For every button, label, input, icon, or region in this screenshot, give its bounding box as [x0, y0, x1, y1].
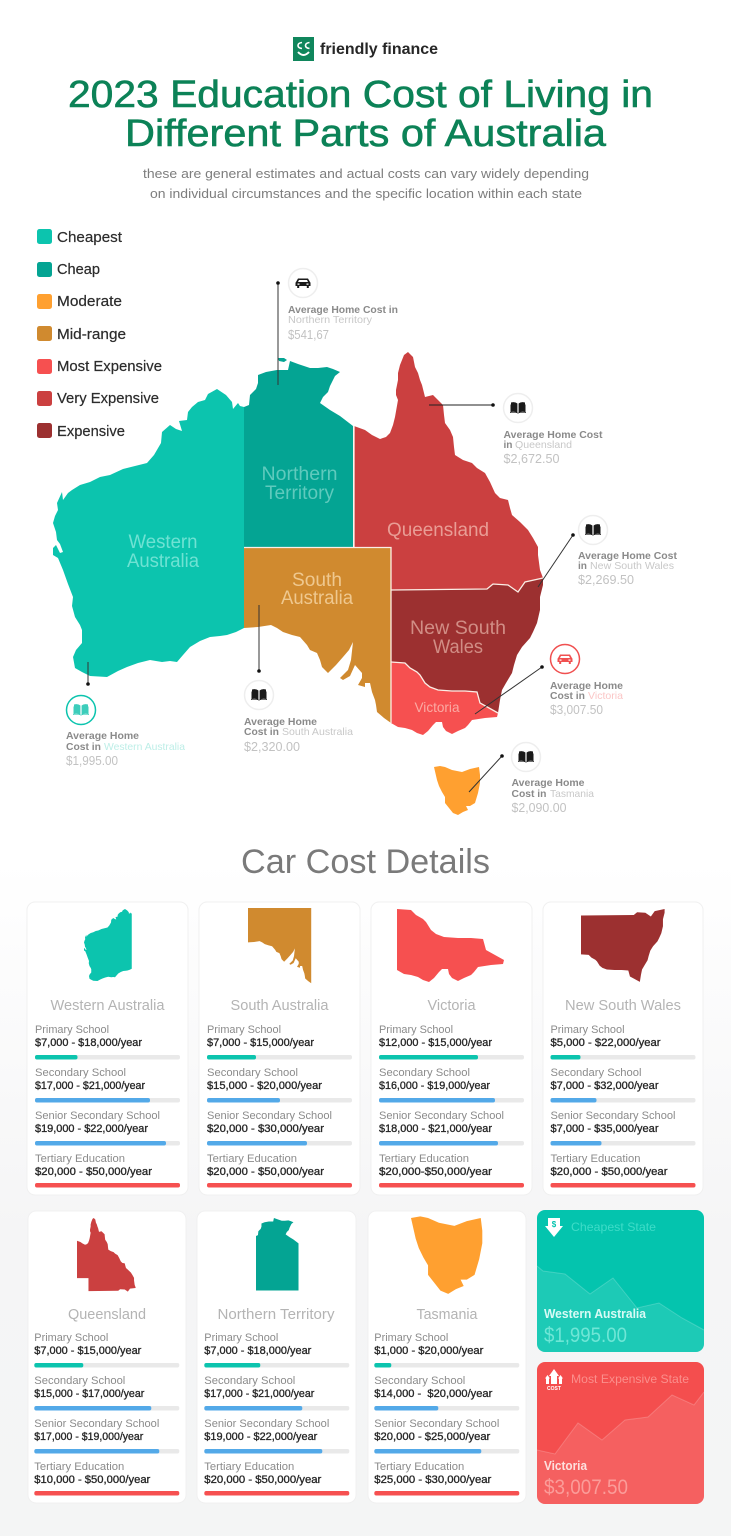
state: Queensland: Queensland — [387, 520, 489, 541]
state: Western Australia: Australia — [127, 551, 199, 572]
callout: Tasmania — [469, 742, 594, 815]
callout: Tasmania: Average Home — [512, 777, 585, 789]
card: Queensland: Secondary School — [34, 1375, 125, 1387]
panel: cheapest state: $1,995.00 — [544, 1324, 627, 1347]
card: Western Australia: Primary School — [35, 1024, 109, 1036]
callout: New South Wales: in — [578, 560, 587, 572]
card: Western Australia: Secondary School — [35, 1067, 126, 1079]
legend: Cheapest — [57, 230, 122, 246]
card: Queensland: Queensland — [68, 1307, 146, 1323]
section heading: Car Cost Details — [241, 843, 490, 881]
state: Tasmania — [434, 766, 480, 815]
card: Tasmania: Tasmania — [416, 1307, 478, 1323]
state: Northern Territory: Territory — [265, 483, 334, 504]
card: Western Australia: Senior Secondary School — [35, 1110, 160, 1122]
card: South Australia: $7,000 - $15,000/year — [207, 1037, 314, 1049]
card: Queensland: Primary School — [34, 1332, 108, 1344]
legend: Most Expensive — [57, 359, 162, 375]
card: Victoria: Tertiary Education — [379, 1153, 469, 1165]
callout: Northern Territory: $541,67 — [288, 327, 329, 342]
card: Queensland: $10,000 - $50,000/year — [34, 1474, 151, 1486]
legend — [37, 229, 162, 440]
card: Northern Territory: Senior Secondary School — [204, 1418, 329, 1430]
card: South Australia: Senior Secondary School — [207, 1110, 332, 1122]
title: Different Parts of Australia — [125, 113, 607, 155]
card: Western Australia: $7,000 - $18,000/year — [35, 1037, 142, 1049]
subtitle: these are general estimates and actual costs can vary widely depending — [143, 166, 589, 181]
callout: Queensland: Average Home Cost — [504, 429, 603, 441]
card: South Australia — [199, 902, 360, 1195]
card: South Australia: Tertiary Education — [207, 1153, 297, 1165]
callout: Victoria — [475, 644, 623, 717]
card: Queensland: $7,000 - $15,000/year — [34, 1345, 142, 1357]
card: Queensland: Senior Secondary School — [34, 1418, 159, 1430]
card: Tasmania — [368, 1211, 526, 1503]
callout: Queensland: Queensland — [515, 439, 572, 451]
card: New South Wales — [543, 902, 703, 1195]
card: New South Wales: $7,000 - $32,000/year — [550, 1080, 659, 1092]
map of Australia — [53, 352, 543, 815]
card: South Australia: $20,000 - $30,000/year — [207, 1123, 324, 1135]
callout: Victoria: Victoria — [588, 690, 623, 702]
card: Western Australia: $20,000 - $50,000/year — [35, 1166, 152, 1178]
card: New South Wales: Tertiary Education — [550, 1153, 640, 1165]
card: Western Australia: Tertiary Education — [35, 1153, 125, 1165]
card: Victoria: Secondary School — [379, 1067, 470, 1079]
card: Northern Territory: Primary School — [204, 1332, 278, 1344]
callout: Western Australia: Average Home — [66, 730, 139, 742]
callout: New South Wales: $2,269.50 — [578, 572, 634, 587]
callout: South Australia: Cost in — [244, 726, 279, 738]
legend: Moderate — [57, 294, 122, 310]
callout: New South Wales: New South Wales — [590, 560, 674, 572]
card: Northern Territory: Secondary School — [204, 1375, 295, 1387]
state: Western Australia — [53, 389, 244, 677]
card: Northern Territory: $20,000 - $50,000/year — [204, 1474, 322, 1486]
logo: friendly finance: friendly finance — [320, 41, 438, 58]
callout: Victoria: $3,007.50 — [550, 702, 603, 717]
card: Queensland — [28, 1211, 186, 1503]
card: Western Australia — [27, 902, 188, 1195]
card: Victoria: Senior Secondary School — [379, 1110, 504, 1122]
card: Tasmania: Tertiary Education — [374, 1461, 464, 1473]
icon: down arrow with dollar — [545, 1218, 563, 1237]
icon: up arrows with cost: COST — [547, 1386, 561, 1392]
logo: friendly finance — [293, 37, 438, 61]
card: Northern Territory: Tertiary Education — [204, 1461, 294, 1473]
state: Queensland — [354, 352, 543, 592]
state: New South Wales: Wales — [433, 637, 483, 658]
card: New South Wales: Primary School — [550, 1024, 624, 1036]
callout: Western Australia: $1,995.00 — [66, 753, 118, 768]
card: Western Australia: $17,000 - $21,000/year — [35, 1080, 145, 1092]
state: Victoria: Victoria — [414, 699, 460, 715]
callout: Victoria: Cost in — [550, 690, 585, 702]
card: Victoria: Primary School — [379, 1024, 453, 1036]
card: Victoria — [371, 902, 532, 1195]
card: Queensland: Tertiary Education — [34, 1461, 124, 1473]
state: South Australia: Australia — [281, 588, 353, 609]
callout: Western Australia: Western Australia — [104, 741, 185, 753]
state: Victoria — [391, 662, 498, 735]
card: Tasmania: Primary School — [374, 1332, 448, 1344]
card: Northern Territory: $19,000 - $22,000/year — [204, 1431, 318, 1443]
callout: South Australia: $2,320.00 — [244, 739, 300, 754]
icon: up arrows with cost — [545, 1369, 563, 1392]
legend: Cheap — [57, 262, 100, 278]
callout: Tasmania: Tasmania — [550, 788, 594, 800]
card: Tasmania: $14,000 - $20,000/year — [374, 1388, 493, 1400]
callout: Northern Territory: Average Home Cost in — [288, 304, 398, 316]
card: New South Wales: $20,000 - $50,000/year — [550, 1166, 668, 1178]
icon: down arrow with dollar: $ — [552, 1220, 557, 1229]
card: South Australia: $15,000 - $20,000/year — [207, 1080, 322, 1092]
panel: most expensive state: Most Expensive State — [571, 1372, 689, 1386]
state: New South Wales: New South — [410, 618, 506, 639]
callout: Tasmania: Cost in — [512, 788, 546, 800]
callout: New South Wales: Average Home Cost — [578, 550, 677, 562]
callout: Tasmania: $2,090.00 — [512, 800, 566, 815]
card: New South Wales: Senior Secondary School — [550, 1110, 676, 1122]
callout: Western Australia — [66, 662, 185, 768]
card: Queensland: $17,000 - $19,000/year — [34, 1431, 144, 1443]
title — [68, 74, 653, 155]
callout: Victoria: Average Home — [550, 680, 623, 692]
panel: most expensive state: $3,007.50 — [544, 1476, 628, 1499]
card: South Australia: $20,000 - $50,000/year — [207, 1166, 324, 1178]
callout: South Australia — [244, 605, 353, 754]
state: New South Wales — [391, 578, 543, 713]
card: Northern Territory — [197, 1211, 356, 1503]
callout: New South Wales — [538, 516, 677, 587]
card: Victoria: Victoria — [428, 998, 476, 1014]
state: Northern Territory — [244, 358, 353, 547]
state: South Australia — [244, 548, 391, 723]
subtitle: on individual circumstances and the specific location within each state — [150, 186, 582, 201]
card: New South Wales: Secondary School — [550, 1067, 642, 1079]
card: Tasmania: $1,000 - $20,000/year — [374, 1345, 484, 1357]
subtitle — [143, 166, 589, 201]
callout: Queensland: $2,672.50 — [504, 451, 560, 466]
callout: South Australia: Average Home — [244, 716, 317, 728]
card: New South Wales: $5,000 - $22,000/year — [550, 1037, 661, 1049]
card: Tasmania: $25,000 - $30,000/year — [374, 1474, 492, 1486]
legend: Very Expensive — [57, 391, 159, 407]
state: South Australia: South — [292, 570, 342, 591]
state: Western Australia: Western — [128, 532, 198, 553]
title: 2023 Education Cost of Living in — [68, 74, 653, 116]
card: Victoria: $12,000 - $15,000/year — [379, 1037, 492, 1049]
card: Western Australia: $19,000 - $22,000/year — [35, 1123, 148, 1135]
card: Tasmania: Secondary School — [374, 1375, 465, 1387]
callout: Queensland: in — [504, 439, 512, 451]
card: South Australia: Secondary School — [207, 1067, 298, 1079]
card: Tasmania: $20,000 - $25,000/year — [374, 1431, 491, 1443]
card: Western Australia: Western Australia — [50, 998, 165, 1014]
state: Northern Territory: Northern — [262, 464, 338, 485]
callout: Western Australia: Cost in — [66, 741, 101, 753]
callout: Queensland — [429, 394, 603, 466]
panel: cheapest state: Cheapest State — [571, 1220, 656, 1234]
card: Victoria: $18,000 - $21,000/year — [379, 1123, 492, 1135]
card: South Australia: Primary School — [207, 1024, 281, 1036]
callout: Northern Territory — [276, 268, 398, 385]
panel: most expensive state — [537, 1362, 704, 1504]
callout: South Australia: South Australia — [282, 726, 353, 738]
card: Northern Territory: Northern Territory — [218, 1307, 335, 1323]
callout: Northern Territory: Northern Territory — [288, 314, 373, 326]
card: New South Wales: $7,000 - $35,000/year — [550, 1123, 659, 1135]
panel: most expensive state: Victoria — [544, 1459, 588, 1473]
card: New South Wales: New South Wales — [565, 998, 681, 1014]
legend: Expensive — [57, 424, 125, 440]
card: Victoria: $16,000 - $19,000/year — [379, 1080, 490, 1092]
card: Tasmania: Senior Secondary School — [374, 1418, 499, 1430]
legend: Mid-range — [57, 327, 126, 343]
panel: cheapest state — [537, 1210, 704, 1352]
panel: cheapest state: Western Australia — [544, 1307, 647, 1321]
card: Northern Territory: $7,000 - $18,000/year — [204, 1345, 312, 1357]
card: South Australia: South Australia — [230, 998, 329, 1014]
card: Northern Territory: $17,000 - $21,000/year — [204, 1388, 315, 1400]
card: Victoria: $20,000-$50,000/year — [379, 1166, 492, 1178]
card: Queensland: $15,000 - $17,000/year — [34, 1388, 145, 1400]
